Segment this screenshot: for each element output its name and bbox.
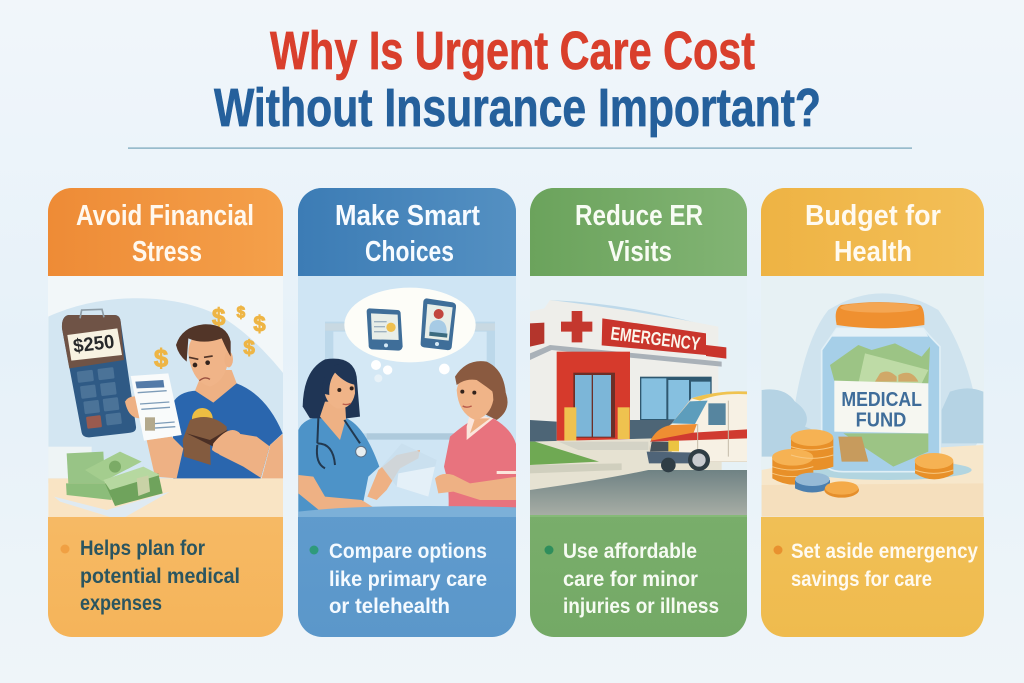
bullet text: reduce ER visits: injuries or illness [563,595,719,618]
icon: falling dollar signs: $ [212,304,225,331]
bullet text: avoid financial stress: potential medical [80,565,240,588]
heading: avoid financial stress: Stress [132,236,202,268]
bullet text: budget for health: savings for care [791,568,932,591]
illustration: nurse and patient conversation [298,276,517,530]
bullet text: reduce ER visits [544,540,719,618]
patient figure [435,361,517,512]
heading: make smart choices: Make Smart [335,200,480,232]
forecourt and road [530,437,748,517]
icon: falling dollar signs: $ [253,312,266,337]
emergency building: EMERGENCY [610,322,702,354]
illustration: worried man with bill and wallet [48,276,283,520]
bullet text: budget for health [774,540,978,591]
bullet text: reduce ER visits: Use affordable [563,540,697,563]
heading: make smart choices: Choices [365,236,454,268]
icon: falling dollar signs: $ [237,305,246,322]
jar lid [836,302,924,328]
heading: reduce ER visits [575,200,703,268]
panel: make smart choices [298,188,517,637]
jar label: MEDICAL [841,388,922,411]
icon: falling dollar signs: $ [243,336,255,359]
jar label: FUND [856,409,906,432]
illustration: medical fund jar with coins [761,276,984,517]
icon: medical bill [131,373,182,441]
heading: make smart choices [335,200,480,268]
emergency building [530,300,726,443]
bullet text: make smart choices: or telehealth [329,595,450,618]
bullet text: avoid financial stress [60,537,240,615]
heading: avoid financial stress: Avoid Financial [76,200,254,232]
heading: reduce ER visits: Visits [608,236,672,268]
bullet text: make smart choices: Compare options [329,540,487,563]
jar label [834,381,928,433]
clipboard sheet [382,450,435,496]
icon: calculator with $250 [62,309,136,437]
title [214,21,821,138]
heading: avoid financial stress [76,200,254,268]
illustration: emergency room and ambulance [530,276,748,518]
icon: brown wallet with coin [183,408,242,465]
man figure [125,324,283,478]
nurse figure [298,359,420,522]
icon: falling dollar signs: $ [154,345,168,373]
thought bubble with devices [344,288,476,382]
jar of money [822,328,940,472]
bullet text: reduce ER visits: care for minor [563,568,698,591]
bullet text: avoid financial stress: Helps plan for [80,537,205,560]
bullet text: budget for health: Set aside emergency [791,540,978,563]
icon: stack of cash [54,452,170,520]
icon: calculator with $250: $250 [72,332,116,358]
panel: avoid financial stress [48,188,283,637]
heading: budget for health: Health [834,236,912,268]
heading: budget for health [805,200,941,268]
bullet text: make smart choices [310,540,487,618]
title: Why Is Urgent Care Cost [270,21,755,81]
bullet text: make smart choices: like primary care [329,568,487,591]
panel: reduce ER visits [530,188,748,637]
bullet text: avoid financial stress: expenses [80,592,162,615]
panel: budget for health [761,188,984,637]
icon: falling dollar signs [154,304,266,373]
coin stacks [772,429,953,498]
heading: reduce ER visits: Reduce ER [575,200,703,232]
ambulance [647,391,748,472]
title: Without Insurance Important? [214,78,821,138]
heading: budget for health: Budget for [805,200,941,232]
